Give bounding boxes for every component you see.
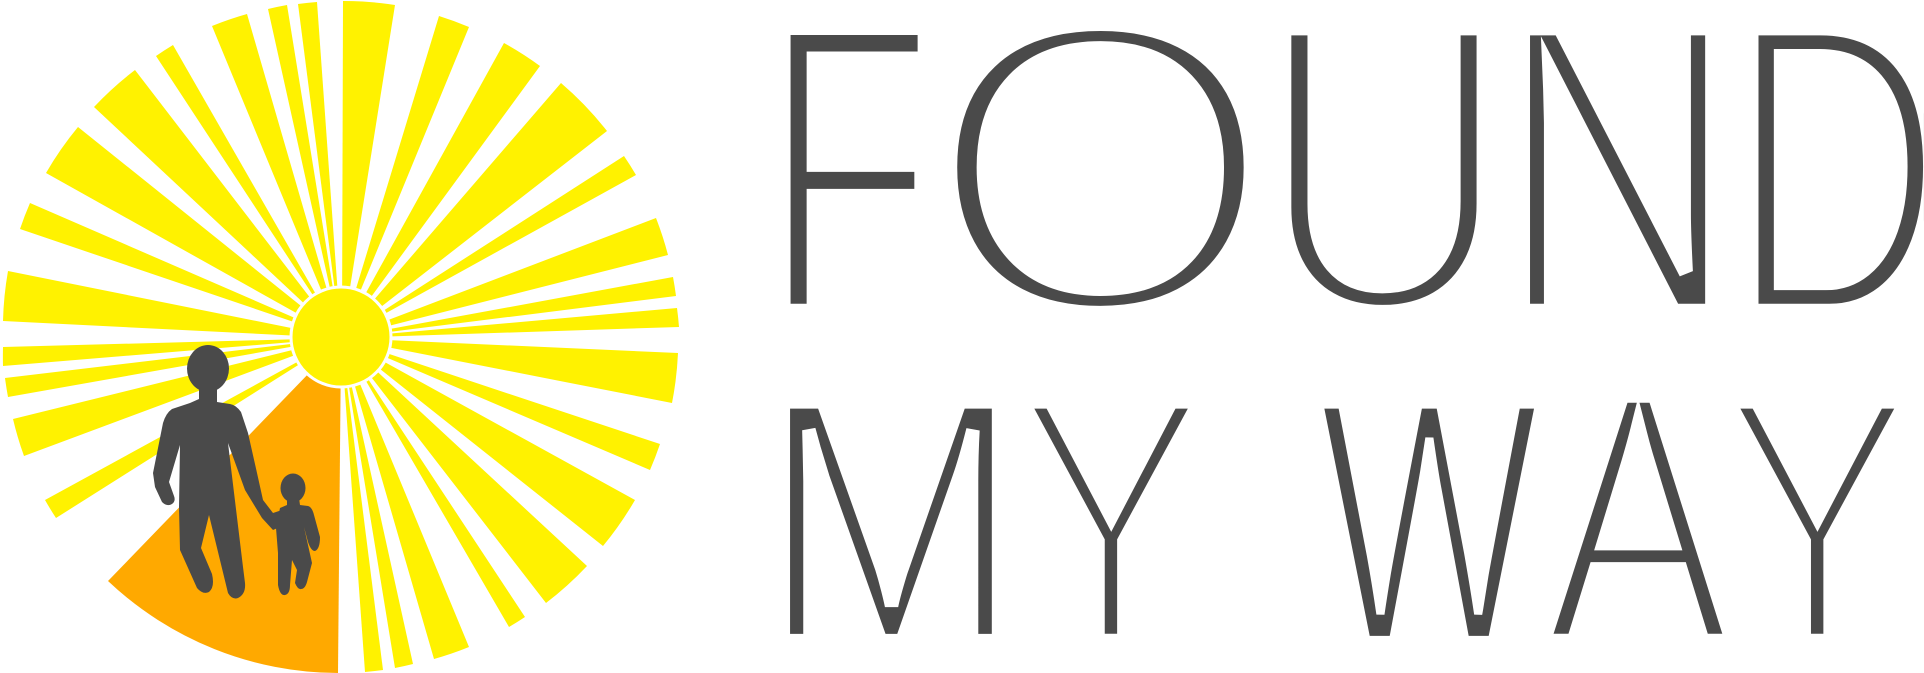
title: WAY — [1318, 382, 1914, 655]
orange path wedge — [108, 340, 341, 673]
icon: child figure — [276, 474, 320, 595]
sun disc — [292, 288, 390, 386]
title: MY — [757, 386, 1208, 655]
icon: adult figure — [153, 345, 282, 598]
sun emblem — [2, 1, 679, 673]
title: FOUND — [762, 8, 1924, 327]
sun rays — [3, 1, 679, 672]
